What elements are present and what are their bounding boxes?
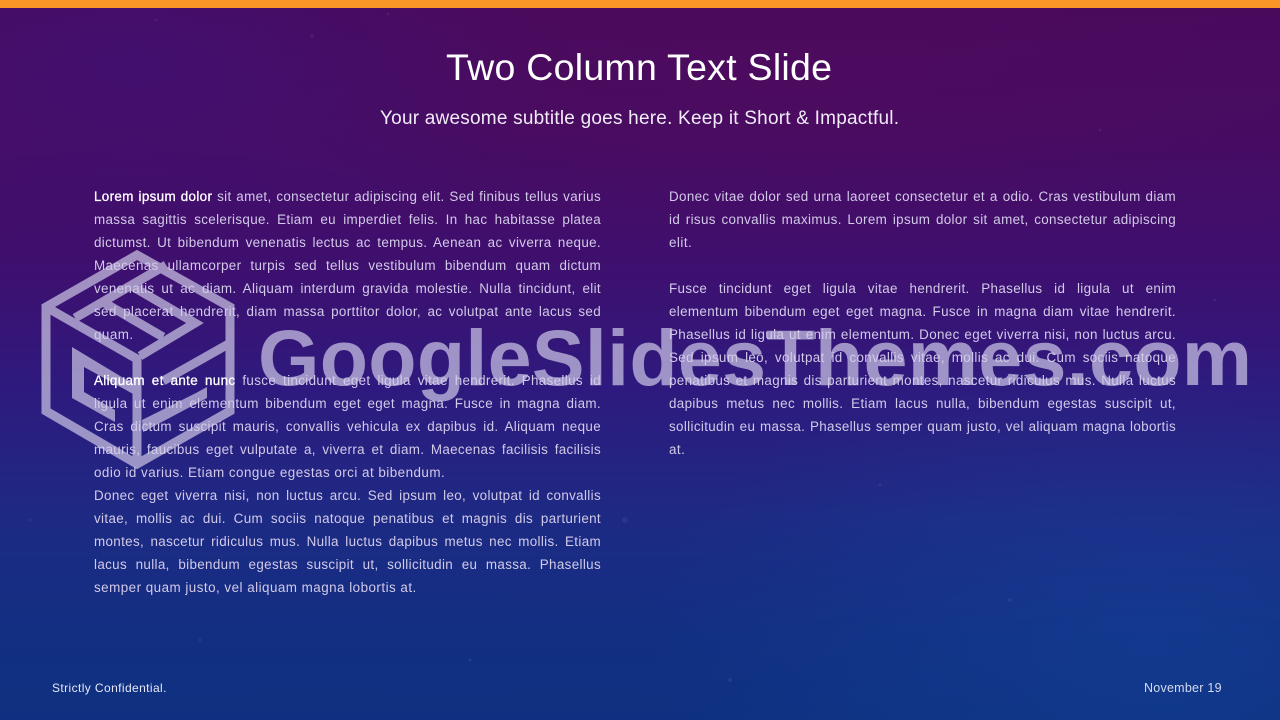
left text column: lacus nulla, bibendum egestas suscipit ut, sollicitudin eu massa. Phasellus [94, 557, 601, 572]
left text column: mauris, faucibus eget vulputate a, viverra et diam. Maecenas facilisis facilisis [94, 442, 601, 457]
left text column [94, 189, 601, 595]
left text column: Lorem ipsum dolor sit amet, consectetur adipiscing elit. Sed finibus tellus varius [94, 189, 601, 204]
left text column: dictumst. Ut bibendum venenatis lectus ac tempus. Aenean ac viverra neque. [94, 235, 601, 250]
subtitle: Your awesome subtitle goes here. Keep it Short & Impactful. [380, 108, 899, 129]
watermark wordmark: GoogleSlidesThemes.com [258, 313, 1252, 402]
top accent bar [0, 0, 1280, 8]
right text column: Fusce tincidunt eget ligula vitae hendrerit. Phasellus id ligula ut enim [669, 281, 1176, 296]
footer left: confidentiality note: Strictly Confidential. [52, 681, 167, 695]
right text column: elit. [669, 235, 692, 250]
right text column: id risus convallis maximus. Lorem ipsum dolor sit amet, consectetur adipiscing [669, 212, 1176, 227]
left text column: venenatis ut ac diam. Aliquam interdum gravida molestie. Nulla tincidunt, elit [94, 281, 601, 296]
right text column: sollicitudin eu massa. Phasellus semper quam justo, vel aliquam magna lobortis [669, 419, 1176, 434]
footer right: date: November 19 [1144, 681, 1222, 695]
right text column: dapibus metus nec mollis. Etiam lacus nulla, bibendum egestas suscipit ut, [669, 396, 1176, 411]
right text column [669, 189, 1176, 457]
left text column: massa sagittis scelerisque. Etiam eu imperdiet felis. In hac habitasse platea [94, 212, 601, 227]
right text column: Phasellus id ligula ut enim elementum. Donec eget viverra nisi, non luctus arcu. [669, 327, 1176, 342]
left text column: odio id varius. Etiam congue egestas orci at bibendum. [94, 465, 445, 480]
left text column: montes, nascetur ridiculus mus. Nulla luctus dapibus metus nec mollis. Etiam [94, 534, 601, 549]
left text column: Cras dictum suscipit mauris, convallis vehicula ex dapibus id. Aliquam neque [94, 419, 601, 434]
left text column: sed placerat hendrerit, diam massa porttitor dolor, ac volutpat ante lacus sed [94, 304, 601, 319]
left text column: Maecenas ullamcorper turpis sed tellus vestibulum bibendum quam dictum [94, 258, 601, 273]
left text column: semper quam justo, vel aliquam magna lobortis at. [94, 580, 417, 595]
right text column: Sed ipsum leo, volutpat id convallis vitae, mollis ac dui. Cum sociis natoque [669, 350, 1176, 365]
left text column: Aliquam et ante nunc fusce tincidunt eget ligula vitae hendrerit. Phasellus id [94, 373, 601, 388]
title: Two Column Text Slide [446, 46, 832, 88]
left text column: quam. [94, 327, 134, 342]
left text column: Donec eget viverra nisi, non luctus arcu. Sed ipsum leo, volutpat id convallis [94, 488, 601, 503]
right text column: elementum bibendum eget eget magna. Fusce in magna diam vitae hendrerit. [669, 304, 1176, 319]
left text column: vitae, mollis ac dui. Cum sociis natoque penatibus et magnis dis parturient [94, 511, 601, 526]
right text column: Donec vitae dolor sed urna laoreet consectetur et a odio. Cras vestibulum diam [669, 189, 1176, 204]
left text column: ligula ut enim elementum bibendum eget eget magna. Fusce in magna diam. [94, 396, 601, 411]
right text column: at. [669, 442, 685, 457]
right text column: penatibus et magnis dis parturient montes, nascetur ridiculus mus. Nulla luctus [669, 373, 1176, 388]
